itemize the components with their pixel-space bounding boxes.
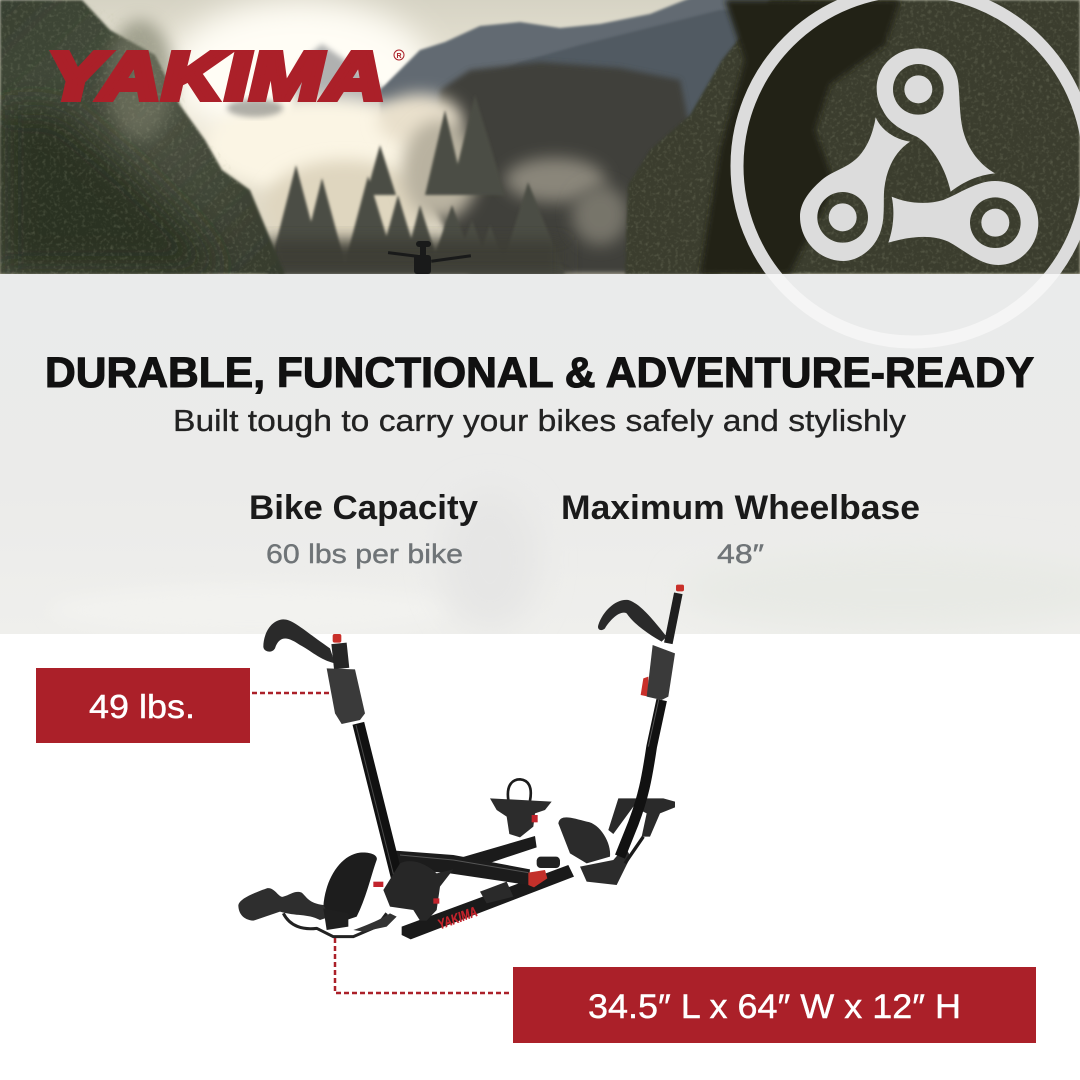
panel: translucent spec panel (0, 274, 1080, 635)
knob behind bar (537, 857, 560, 868)
right wheel cradle (558, 817, 610, 863)
illustration: bike rack product (238, 585, 684, 939)
callout: weight: 49 lbs. (89, 688, 195, 725)
right hub (580, 847, 631, 885)
red end cap (528, 870, 547, 887)
subheading: Built tough to carry your bikes safely and stylishly (173, 403, 907, 438)
left foot hook (238, 888, 397, 937)
left clamp (327, 634, 365, 724)
main hitch bar (402, 865, 574, 939)
right hook arm (598, 600, 667, 642)
heading: DURABLE, FUNCTIONAL & ADVENTURE-READY (45, 349, 1034, 397)
spec: bike capacity: 60 lbs per bike (266, 539, 463, 569)
callout: dimensions (335, 938, 1036, 1043)
callout: weight (36, 668, 331, 743)
spec: maximum wheelbase: 48″ (717, 539, 765, 569)
spec: bike capacity: Bike Capacity (249, 489, 478, 527)
logo: Yakima wordmark: YAKIMA (46, 35, 386, 118)
right support post (620, 700, 662, 857)
hero photo: misty forest (0, 0, 1080, 274)
rear bar (458, 836, 537, 867)
left support post (358, 723, 397, 877)
icon: chain link in circle (737, 0, 1080, 342)
main hitch bar: YAKIMA (436, 903, 479, 932)
right clamp (641, 585, 684, 700)
left wheel cradle (323, 852, 377, 920)
right lower cradle (608, 798, 675, 837)
right tree mass (625, 0, 1080, 274)
far wheel cradle (490, 779, 552, 837)
bike handlebar silhouette (388, 241, 471, 274)
left hook arm (263, 619, 335, 663)
conifers (268, 95, 565, 274)
left tree mass (0, 0, 285, 274)
front cross tube (395, 851, 530, 885)
center hub (383, 861, 453, 921)
spec: maximum wheelbase: Maximum Wheelbase (561, 489, 920, 527)
logo: Yakima wordmark: R (396, 53, 402, 60)
spec: maximum wheelbase (561, 489, 920, 569)
callout: dimensions: 34.5″ L x 64″ W x 12″ H (588, 988, 961, 1026)
spec: bike capacity (249, 489, 478, 569)
logo: Yakima wordmark (49, 50, 404, 102)
